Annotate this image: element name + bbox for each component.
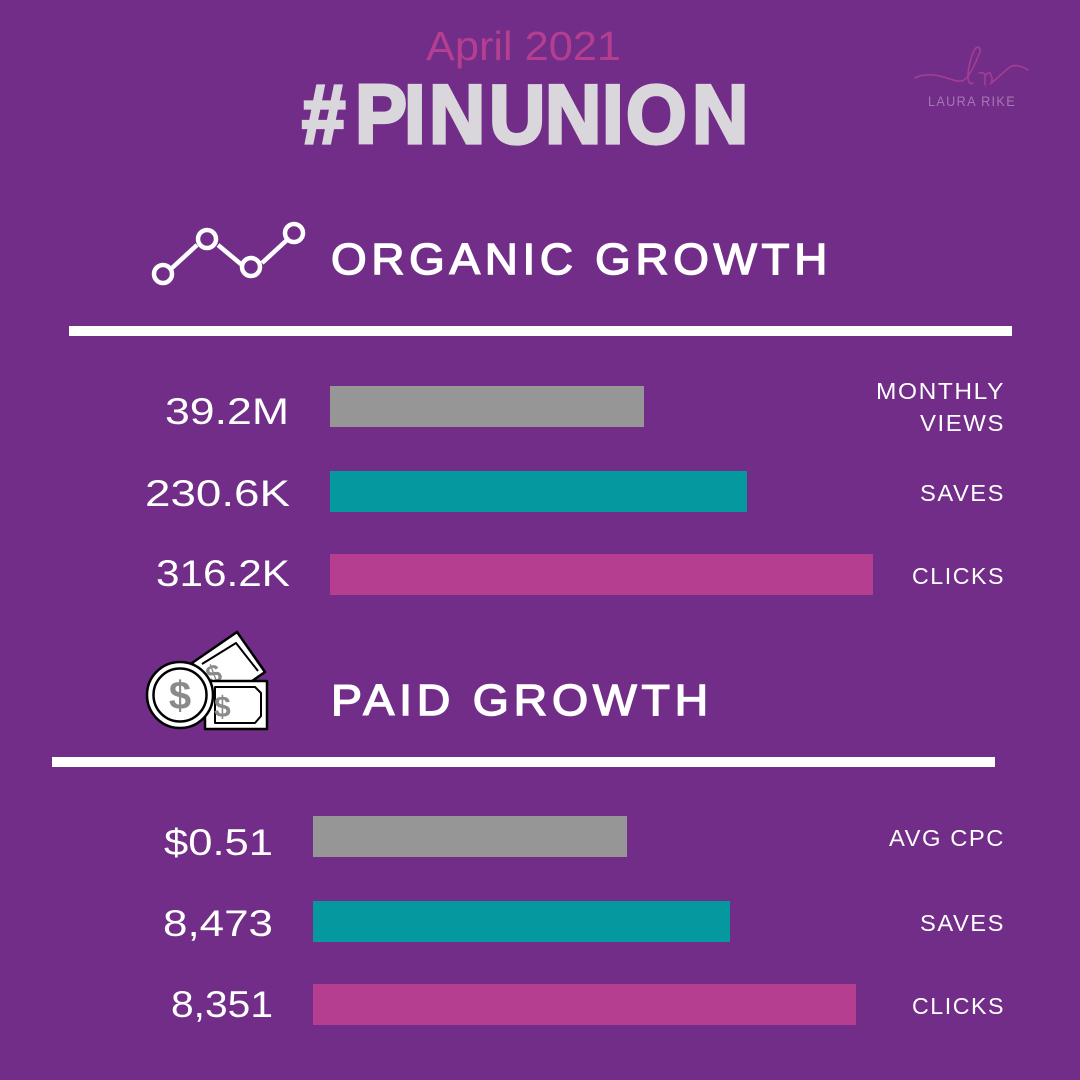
logo: Laura Rike [915, 47, 1028, 109]
organic row: saves: SAVES [920, 480, 1005, 506]
organic row: monthly views: 39.2M [165, 391, 289, 432]
paid divider [52, 757, 995, 767]
organic row: saves: 230.6K [145, 473, 290, 514]
panel: organic stats [145, 378, 1005, 595]
paid row: saves [163, 901, 1005, 944]
heading: paid growth: PAID GROWTH [331, 676, 713, 725]
organic row: clicks [156, 553, 1005, 595]
paid row: avg cpc: AVG CPC [889, 825, 1005, 851]
paid row: clicks: 8,351 [171, 984, 273, 1025]
subtitle: April 2021: April 2021 [426, 23, 621, 69]
paid row: clicks [171, 984, 1005, 1025]
paid row: saves: 8,473 [163, 903, 273, 944]
organic row: clicks: 316.2K [156, 553, 290, 594]
icon: money [147, 632, 267, 729]
organic row: monthly views [165, 378, 1005, 436]
paid row: avg cpc [164, 816, 1005, 863]
logo: Laura Rike: LAURA RIKE [928, 93, 1016, 109]
icon: money: $ [169, 674, 191, 718]
organic divider [69, 326, 1012, 336]
organic row: clicks: CLICKS [912, 563, 1005, 589]
paid row: avg cpc: $0.51 [164, 822, 273, 863]
icon: line chart [154, 224, 303, 283]
panel: paid stats [163, 816, 1005, 1025]
organic row: saves [145, 471, 1005, 514]
heading: organic growth: ORGANIC GROWTH [331, 235, 832, 284]
organic row: monthly views: VIEWS [920, 410, 1005, 436]
icon: money: $ [202, 657, 226, 690]
paid row: clicks: CLICKS [912, 993, 1005, 1019]
icon: money: $ [214, 691, 231, 724]
paid row: saves: SAVES [920, 910, 1005, 936]
organic row: monthly views: MONTHLY [876, 378, 1005, 404]
title: #PINUNION: #PINUNION [302, 69, 748, 162]
